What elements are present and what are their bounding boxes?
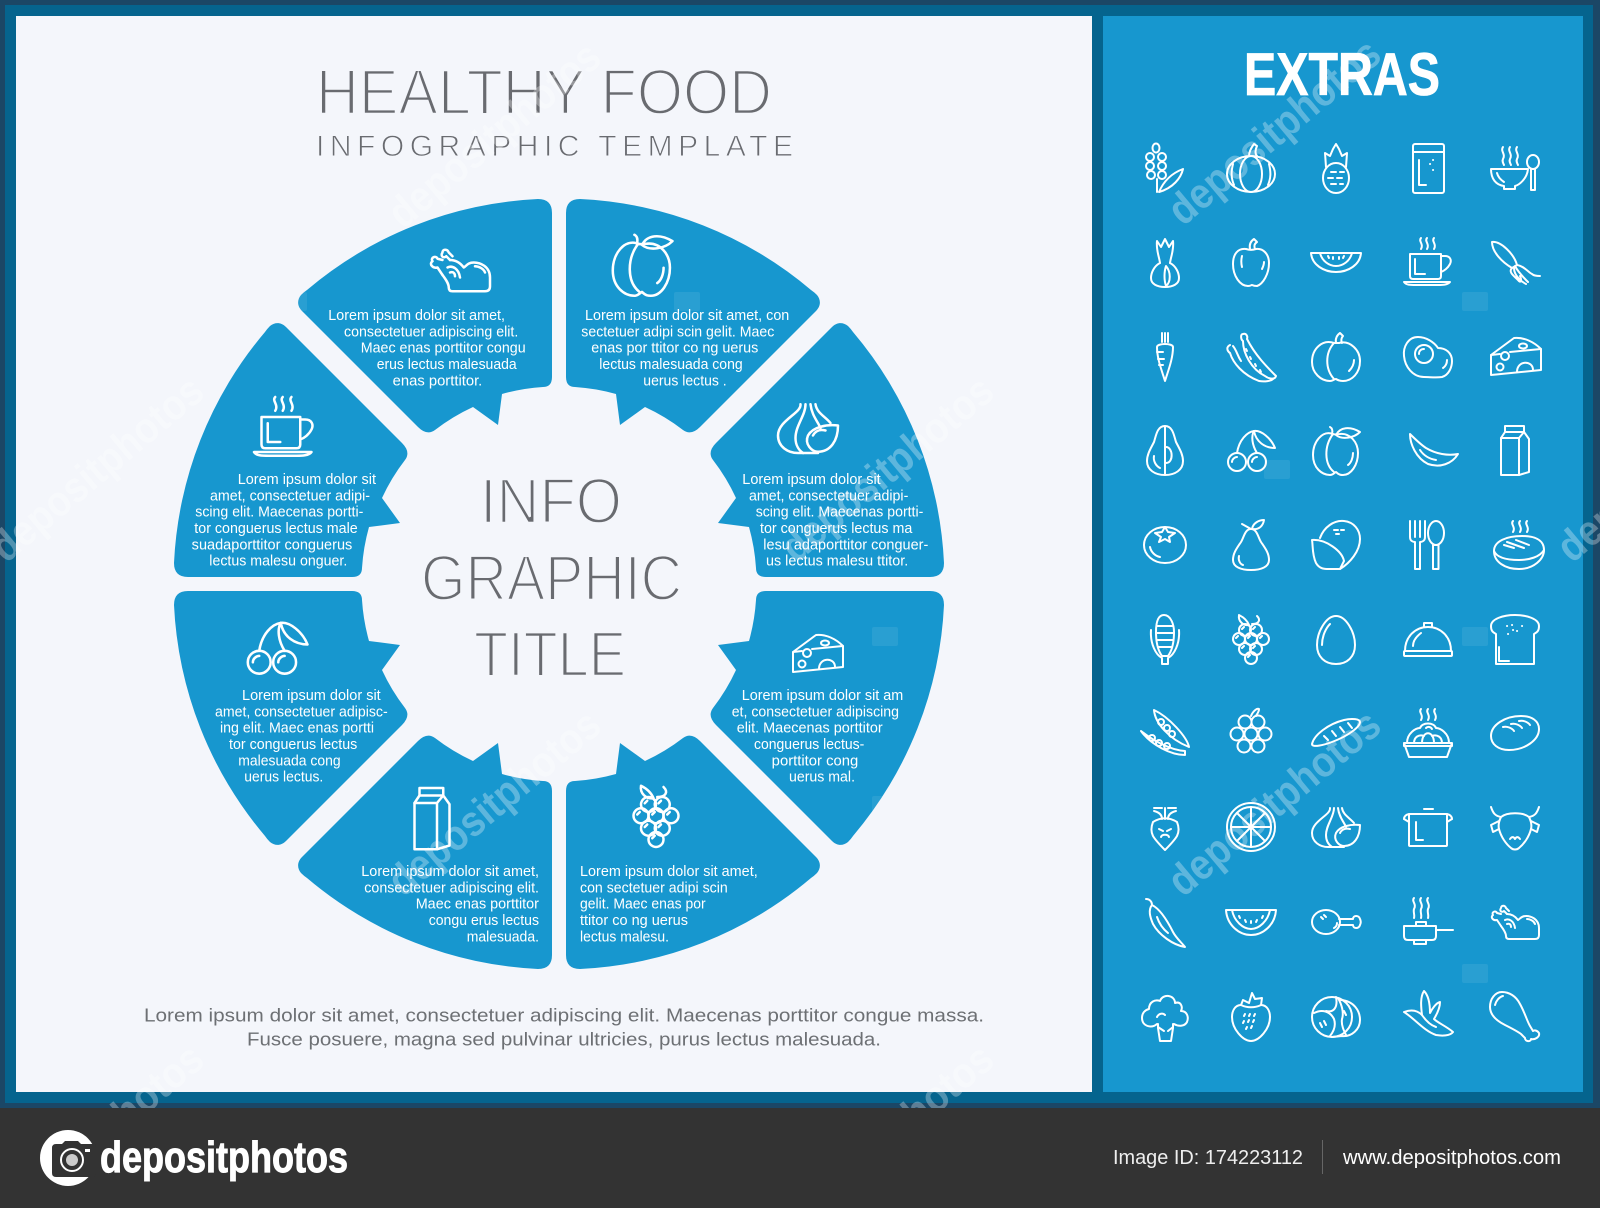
text: top right: lectus malesuada cong <box>599 357 743 373</box>
icon: bell pepper <box>1233 239 1269 286</box>
text: top right: sectetuer adipi scin gelit. Maec <box>581 324 774 340</box>
text: top right: uerus lectus . <box>643 373 727 389</box>
icon: peach round <box>1312 333 1360 381</box>
icon: broccoli <box>1142 996 1188 1041</box>
text: right lower: porttitor cong <box>772 753 858 769</box>
footer text block: Fusce posuere, magna sed pulvinar ultricies, purus lectus malesuada. <box>247 1028 881 1050</box>
icon: cow head <box>1491 807 1539 850</box>
icon: melon slice <box>1311 253 1361 272</box>
icon: watermelon <box>1226 910 1276 935</box>
text: top left: consectetuer adipiscing elit. <box>344 324 518 340</box>
text: left upper: scing elit. Maecenas portti- <box>195 505 363 521</box>
icon: garlic small <box>1312 808 1360 847</box>
text: left lower: amet, consectetuer adipisc- <box>215 704 388 720</box>
icon: cloche <box>1404 623 1452 656</box>
icon: glass of water <box>1413 144 1444 193</box>
panel: segment right lower, cheese <box>711 591 944 845</box>
icon: milk small <box>1501 426 1529 475</box>
text: left lower: ing elit. Maec enas portti <box>220 721 374 737</box>
text: right upper: lesu adaporttitor conguer- <box>763 537 928 553</box>
icon: drumstick <box>1490 992 1539 1041</box>
text: bottom left <box>361 864 539 945</box>
icon: chili <box>1146 899 1185 947</box>
panel: segment bottom left, milk <box>298 736 552 969</box>
text: left upper: Lorem ipsum dolor sit <box>238 472 376 488</box>
text: left lower: Lorem ipsum dolor sit <box>242 688 381 704</box>
text: left upper: lectus malesu onguer. <box>209 554 347 570</box>
center title <box>421 465 682 690</box>
icon: fork and spoon <box>1410 521 1444 569</box>
text: left lower: uerus lectus. <box>244 770 323 786</box>
icon: carrot <box>1157 333 1173 381</box>
icon: pot <box>1404 809 1452 846</box>
text: right lower: Lorem ipsum dolor sit am <box>742 688 903 704</box>
icon: milk carton <box>414 788 450 849</box>
icon: coffee cup small <box>1404 238 1451 285</box>
text: bottom left: malesuada. <box>467 929 539 945</box>
text: right lower <box>732 688 903 786</box>
text: bottom left: consectetuer adipiscing elit. <box>364 880 539 896</box>
logo: depositphotos: depositphotos <box>100 1133 348 1182</box>
icon: wheat <box>1146 144 1183 192</box>
text: bottom left: Lorem ipsum dolor sit amet, <box>361 864 539 880</box>
text: left lower <box>215 688 388 786</box>
icon: cherries small <box>1228 431 1275 471</box>
icon: bread slice <box>1491 615 1539 664</box>
text: top right: enas por ttitor co ng uerus <box>591 341 758 357</box>
text: right upper: scing elit. Maecenas portti- <box>756 505 923 521</box>
watermarks: depositphotos: depositphotos <box>379 700 610 906</box>
icon: pea pods <box>1141 710 1189 755</box>
text: top left: erus lectus malesuada <box>377 357 518 373</box>
icon: pea pods curved <box>1227 334 1276 381</box>
text: right upper: us lectus malesu ttitor. <box>766 554 908 570</box>
text: left lower: malesuada cong <box>238 753 341 769</box>
icon: pumpkin <box>1227 144 1275 192</box>
icon: frying pan <box>1404 898 1453 944</box>
text: bottom right: ttitor co ng uerus <box>580 913 688 929</box>
text: right upper: amet, consectetuer adipi- <box>749 488 908 504</box>
icon: mango halves <box>1312 521 1360 569</box>
text: bottom left: congu erus lectus <box>429 913 539 929</box>
text: bottom right: con sectetuer adipi scin <box>580 880 728 896</box>
panel: segment left upper, coffee <box>174 323 407 577</box>
text: top left: enas porttitor. <box>393 373 482 389</box>
icon: garlic <box>778 404 838 453</box>
text: left upper: suadaporttitor conguerus <box>192 537 352 553</box>
icon grid: extras <box>1141 144 1544 1041</box>
text: right upper <box>742 472 928 570</box>
icon: peach <box>613 235 672 296</box>
icon: onion <box>1151 239 1179 287</box>
heading: extras: EXTRAS <box>1244 41 1440 108</box>
icon: cheese <box>793 635 843 672</box>
text: top right <box>581 308 789 389</box>
watermarks: depositphotos: depositphotos <box>1159 700 1390 906</box>
icon: peach with leaf <box>1313 427 1360 475</box>
icon: peeled banana <box>1404 991 1453 1036</box>
icon: steak <box>1494 521 1544 569</box>
text: left lower: tor conguerus lectus <box>229 737 357 753</box>
icon: avocado <box>1147 426 1183 475</box>
icon: grapes small <box>1233 615 1269 664</box>
text: bottom left: Maec enas porttitor <box>416 897 539 913</box>
watermarks: depositphotos: depositphotos <box>1159 29 1390 235</box>
text: right lower: conguerus lectus- <box>754 737 864 753</box>
center title: TITLE <box>474 618 626 690</box>
panel: segment top right, peach <box>566 199 820 432</box>
icon: soup bowl and spoon <box>1491 147 1539 190</box>
panel: segment right upper, garlic <box>711 323 944 577</box>
icon: fried egg <box>1404 337 1452 377</box>
icon: corn <box>1151 615 1179 664</box>
website text: www.depositphotos.com <box>1342 1147 1561 1169</box>
icon: egg <box>1317 616 1355 664</box>
icon: meat on bone <box>1312 910 1361 934</box>
icon: beet <box>1152 808 1178 850</box>
icon: chicken small <box>1492 906 1539 939</box>
text: top left: Lorem ipsum dolor sit amet, <box>328 308 505 324</box>
text: right lower: uerus mal. <box>789 770 855 786</box>
icon: chicken <box>431 250 490 291</box>
title: healthy food: HEALTHY FOOD <box>316 56 772 128</box>
text: right lower: elit. Maecenas porttitor <box>737 721 883 737</box>
icon: bread loaf <box>1491 716 1539 750</box>
panel: segment top left, chicken <box>298 199 552 432</box>
icon: pasta <box>1404 709 1452 757</box>
center title: GRAPHIC <box>421 542 682 614</box>
footer bar <box>0 1108 1600 1208</box>
icon: baguette <box>1312 719 1360 746</box>
text: bottom right: Lorem ipsum dolor sit amet, <box>580 864 758 880</box>
text: top left: Maec enas porttitor congu <box>361 341 526 357</box>
icon: coffee cup <box>254 397 312 456</box>
image id text: Image ID: 174223112 <box>1113 1147 1303 1169</box>
logo: depositphotos <box>40 1130 348 1186</box>
text: right upper: Lorem ipsum dolor sit <box>742 472 881 488</box>
panel: segment bottom right, grapes <box>566 736 820 969</box>
footer text block: Lorem ipsum dolor sit amet, consectetuer adipiscing elit. Maecenas porttitor congue massa. <box>144 1004 984 1026</box>
icon: strawberry <box>1232 993 1270 1041</box>
text: bottom right: lectus malesu. <box>580 929 669 945</box>
watermarks: depositphotos: depositphotos <box>772 366 1003 572</box>
text: left upper <box>192 472 376 570</box>
icon: cherries <box>248 623 307 674</box>
text: bottom right: gelit. Maec enas por <box>580 897 706 913</box>
watermarks: depositphotos: depositphotos <box>379 32 610 238</box>
icon: banana <box>1410 434 1458 466</box>
icon: berry cluster <box>1230 709 1272 752</box>
panel: segment left lower, cherries <box>174 591 407 845</box>
icon: pear <box>1233 520 1269 570</box>
text: left upper: tor conguerus lectus male <box>194 521 358 537</box>
icon: citrus slice <box>1227 803 1275 851</box>
subtitle: infographic template: INFOGRAPHIC TEMPLATE <box>316 130 793 163</box>
text: top right: Lorem ipsum dolor sit amet, con <box>585 308 789 324</box>
text: right lower: et, consectetuer adipiscing <box>732 704 899 720</box>
icon: cabbage <box>1312 997 1360 1037</box>
center title: INFO <box>480 465 622 537</box>
footer text block <box>144 1004 984 1050</box>
text: right upper: tor conguerus lectus ma <box>760 521 913 537</box>
text: top left <box>328 308 526 389</box>
panel: main infographic background <box>16 16 1092 1092</box>
text: left upper: amet, consectetuer adipi- <box>210 488 370 504</box>
icon: tomato <box>1144 527 1186 563</box>
text: bottom right <box>580 864 758 945</box>
icon: grapes <box>634 786 678 847</box>
icon: pineapple <box>1323 144 1349 193</box>
icon: squid <box>1492 242 1540 284</box>
icon: cheese small <box>1491 338 1541 375</box>
panel: extras background <box>1103 16 1583 1092</box>
